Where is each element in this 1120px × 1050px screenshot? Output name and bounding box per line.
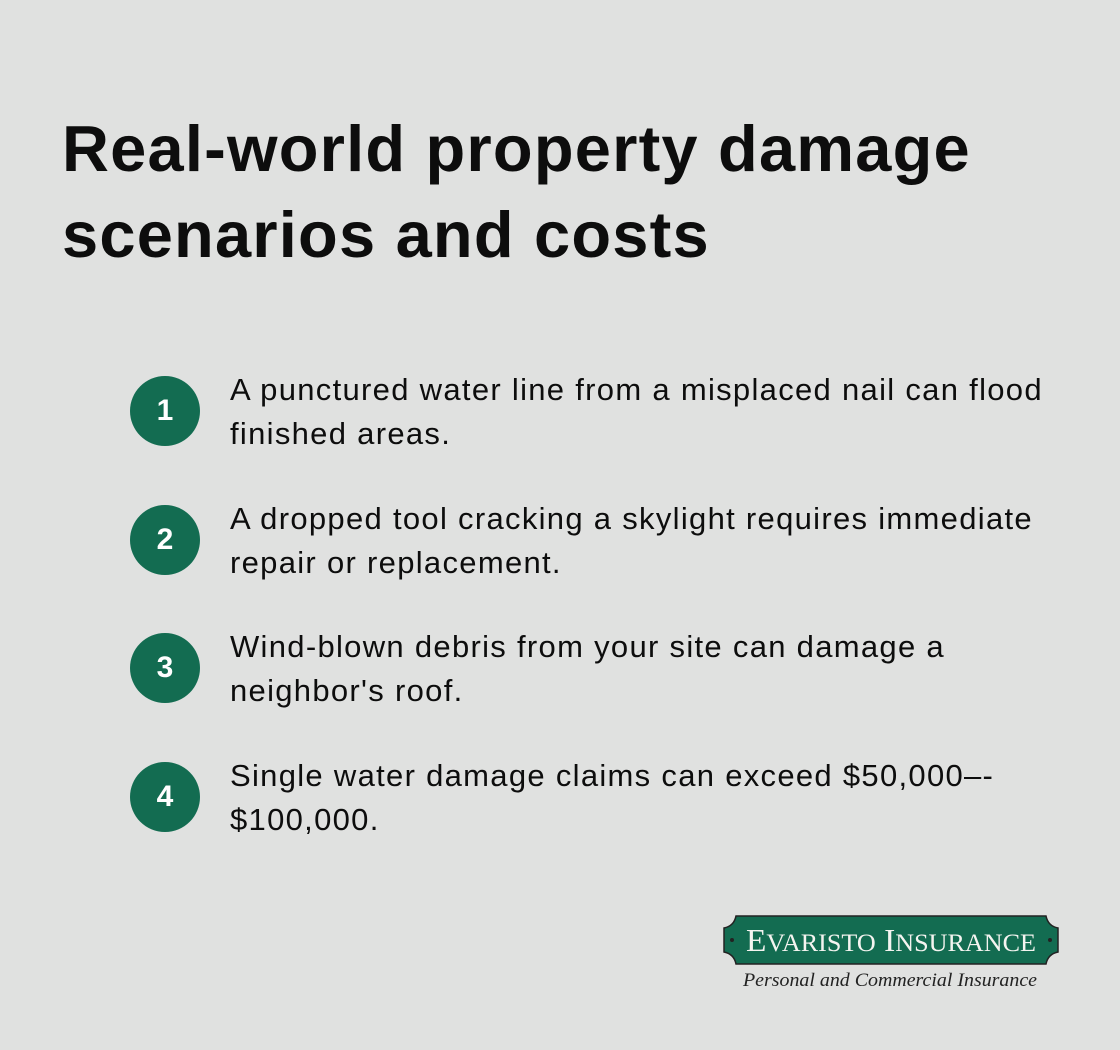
title: Real-world property damage bbox=[62, 112, 971, 185]
title: scenarios and costs bbox=[62, 198, 710, 271]
item 3 bbox=[130, 629, 945, 708]
number badge 1 bbox=[130, 376, 200, 446]
logo bbox=[723, 915, 1059, 991]
text 3: Wind-blown debris from your site can damage a bbox=[230, 629, 945, 664]
item 4 bbox=[130, 758, 994, 837]
text 2: A dropped tool cracking a skylight requires immediate bbox=[230, 501, 1033, 536]
number badge 3: 3 bbox=[157, 651, 173, 684]
number badge 4 bbox=[130, 762, 200, 832]
item 2 bbox=[130, 501, 1033, 580]
text 4 bbox=[230, 758, 994, 837]
logo: EVARISTO INSURANCE bbox=[746, 922, 1036, 958]
number badge 4: 4 bbox=[157, 780, 173, 813]
title bbox=[62, 112, 971, 271]
text 1 bbox=[230, 372, 1043, 451]
number badge 1: 1 bbox=[157, 394, 173, 427]
text 4: $100,000. bbox=[230, 802, 380, 837]
text 2 bbox=[230, 501, 1033, 580]
number badge 2: 2 bbox=[157, 523, 173, 556]
number badge 2 bbox=[130, 505, 200, 575]
text 4: Single water damage claims can exceed $50,000–- bbox=[230, 758, 994, 793]
text 2: repair or replacement. bbox=[230, 545, 562, 580]
text 3: neighbor's roof. bbox=[230, 673, 464, 708]
item 1 bbox=[130, 372, 1043, 451]
logo: Personal and Commercial Insurance bbox=[742, 970, 1037, 991]
number badge 3 bbox=[130, 633, 200, 703]
text 1: finished areas. bbox=[230, 416, 451, 451]
text 3 bbox=[230, 629, 945, 708]
text 1: A punctured water line from a misplaced nail can flood bbox=[230, 372, 1043, 407]
